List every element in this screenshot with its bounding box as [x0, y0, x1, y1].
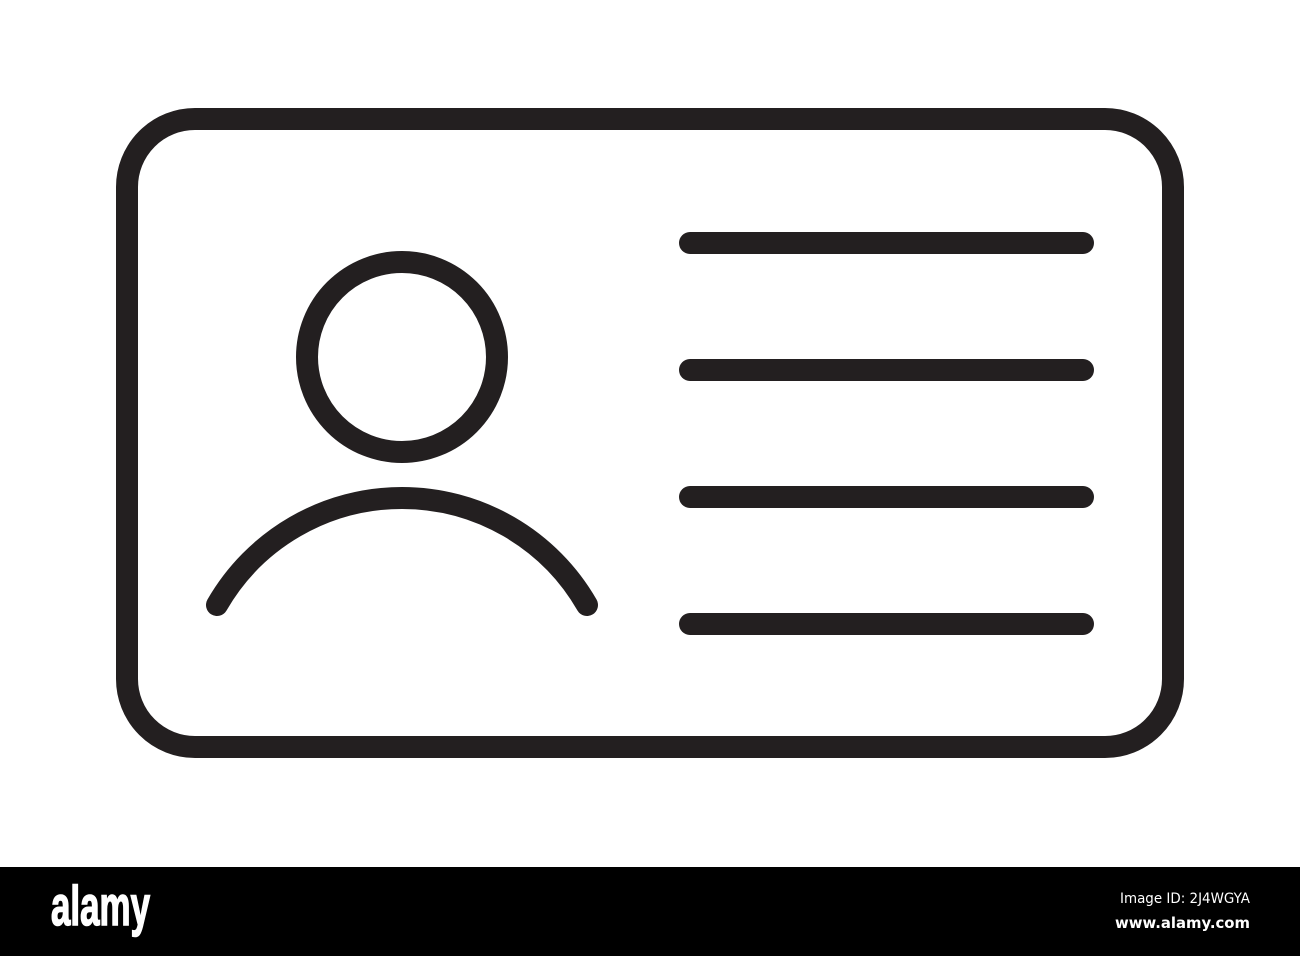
image ID: Image ID: 2J4WGYA: [1120, 891, 1250, 907]
alamy logo: alamy: [51, 874, 150, 937]
card outline: [127, 119, 1173, 747]
text lines: [690, 243, 1083, 624]
website: www.alamy.com: [1115, 914, 1250, 932]
person shoulders: [217, 498, 587, 605]
person head: [307, 262, 497, 452]
footer bar: [0, 867, 1300, 956]
icon: ID card: [127, 119, 1173, 747]
